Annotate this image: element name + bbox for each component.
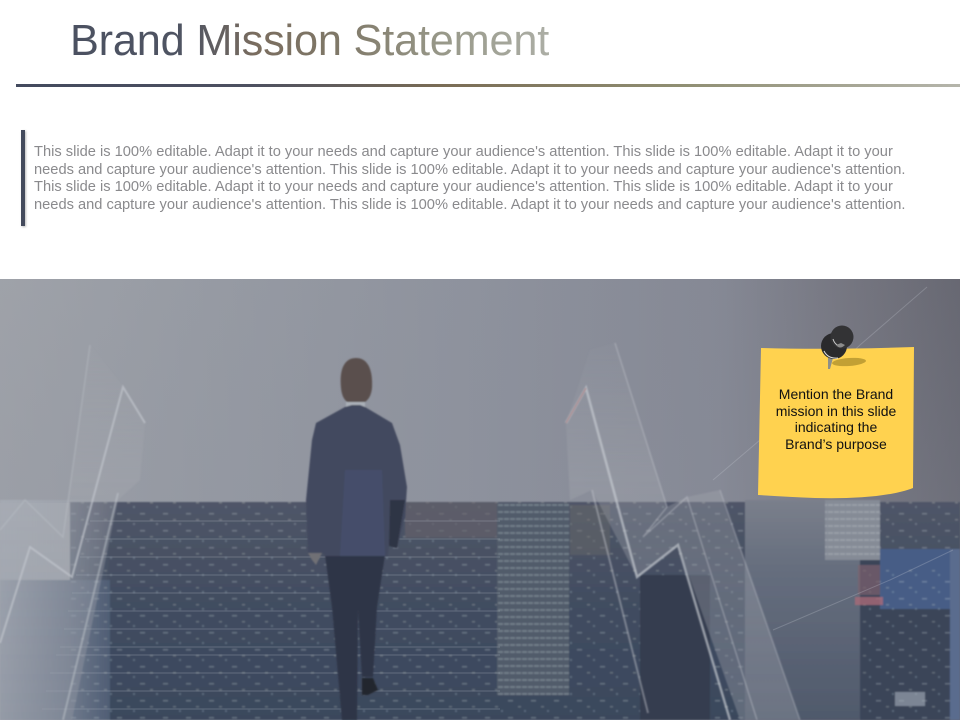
shoe — [362, 678, 378, 695]
left arrow — [0, 345, 145, 720]
text block: description: This slide is 100% editable. Adapt it to your needs and capture your audience's attention. This slide is 100% editable. Adapt it to your — [34, 144, 893, 160]
callout: sticky note text: Brand’s purpose — [785, 436, 887, 452]
panel: background photo of businessman and city — [0, 279, 960, 720]
text block: description: This slide is 100% editable. Adapt it to your needs and capture your audience's attention. This slide is 100% editable. Adapt it to your — [34, 179, 893, 195]
chart line — [713, 287, 953, 630]
callout: sticky note text: indicating the — [795, 419, 877, 435]
callout: sticky note text: Mention the Brand — [779, 386, 893, 402]
stair lines — [42, 521, 500, 709]
legs — [325, 555, 385, 720]
text block: description: needs and capture your audience's attention. This slide is 100% editable. Adapt it to your needs and capture your audience's attention. — [34, 196, 905, 212]
title: Brand Mission Statement — [70, 17, 549, 65]
callout: sticky note text — [776, 386, 896, 452]
sky — [0, 279, 960, 720]
pin — [821, 326, 866, 369]
text block: description — [34, 144, 905, 212]
businessman — [306, 358, 407, 720]
right arrow — [566, 343, 800, 720]
head — [341, 358, 372, 404]
accent bar — [21, 130, 25, 226]
text block: description: needs and capture your audience's attention. This slide is 100% editable. Adapt it to your needs and capture your audience's attention. — [34, 162, 905, 178]
callout: sticky note text: mission in this slide — [776, 403, 896, 419]
jacket — [306, 405, 407, 556]
city skyline — [0, 500, 960, 720]
sticky note — [758, 326, 914, 498]
